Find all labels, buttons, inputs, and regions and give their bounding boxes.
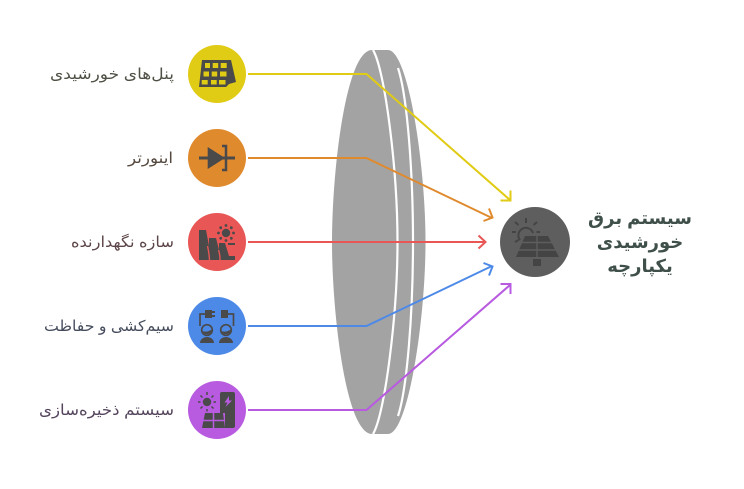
label: wiring and protection: سیم‌کشی و حفاظت (44, 318, 174, 335)
icon: storage system (188, 381, 246, 439)
lens shape (332, 50, 426, 434)
icon: mounting structure (188, 213, 246, 271)
label: solar panels: پنل‌های خورشیدی (50, 66, 174, 84)
label: mounting structure: سازه نگهدارنده (71, 233, 174, 251)
arrow: mounting structure (248, 236, 486, 248)
arrow: solar panels (248, 74, 510, 200)
title: integrated solar power system: خورشیدی (597, 232, 683, 253)
title: integrated solar power system: یکپارچه (607, 256, 673, 277)
arrow: wiring and protection (248, 263, 492, 326)
icon: solar panels (188, 45, 246, 103)
title: integrated solar power system: سیستم برق (588, 208, 692, 229)
icon: inverter diode (188, 129, 246, 187)
icon: wiring and protection (188, 297, 246, 355)
icon: integrated solar system (500, 207, 570, 277)
label: storage system: سیستم ذخیره‌سازی (39, 402, 174, 419)
label: inverter: اینورتر (127, 150, 173, 167)
arrow: storage system (248, 284, 510, 410)
arrow: inverter (248, 158, 492, 221)
title: integrated solar power system (588, 208, 692, 277)
